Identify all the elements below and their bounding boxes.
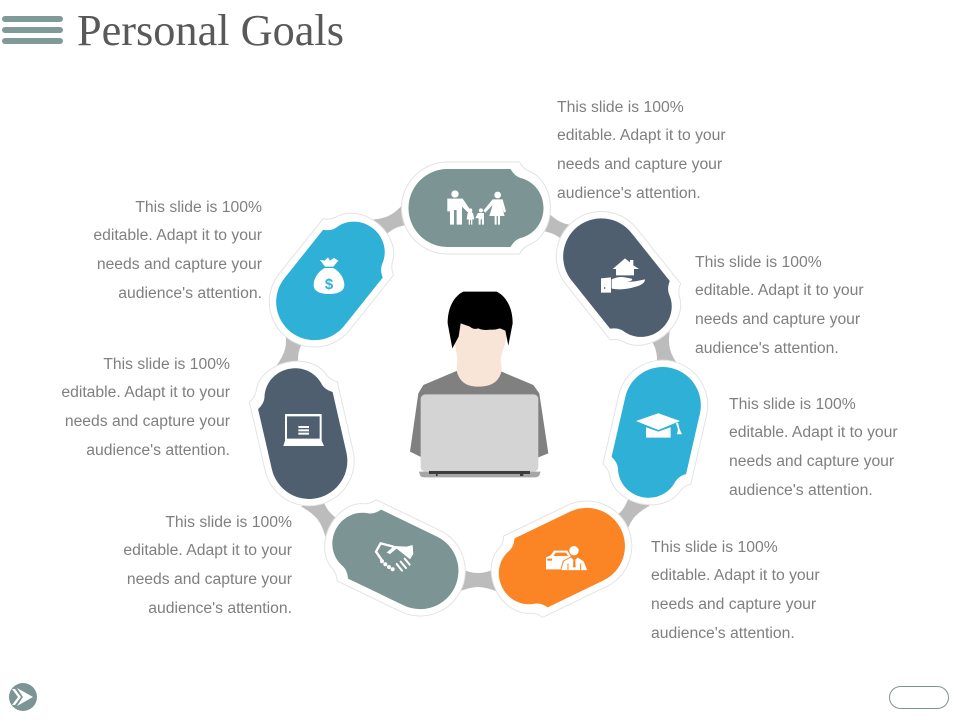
pill: car and person xyxy=(476,486,647,630)
text: family: editable. Adapt it to your xyxy=(557,127,726,144)
text: money: audience's attention. xyxy=(118,285,262,302)
icon: graduation cap xyxy=(636,413,682,438)
text: laptop xyxy=(61,356,230,459)
text: house: needs and capture your xyxy=(695,311,860,328)
text: house: This slide is 100% xyxy=(695,254,822,270)
text: money: editable. Adapt it to your xyxy=(93,227,262,244)
text: car: needs and capture your xyxy=(651,596,816,613)
pill: money xyxy=(251,195,413,365)
text: laptop: needs and capture your xyxy=(65,413,230,430)
text: handshake: audience's attention. xyxy=(148,600,292,617)
text: car xyxy=(651,538,820,642)
icon: family xyxy=(447,190,506,225)
icon: money bag xyxy=(314,257,344,294)
text: house xyxy=(695,254,864,357)
text: handshake: This slide is 100% xyxy=(165,514,292,530)
rounded button xyxy=(890,686,948,708)
text: car: editable. Adapt it to your xyxy=(651,567,820,584)
ring connectors xyxy=(276,202,679,592)
icon: car dealer xyxy=(546,546,588,571)
pill: laptop xyxy=(243,352,363,515)
icon: handshake xyxy=(376,543,413,571)
pill: family xyxy=(402,162,550,254)
text: graduation: needs and capture your xyxy=(729,453,894,470)
text: graduation: This slide is 100% xyxy=(729,396,856,412)
text: house: editable. Adapt it to your xyxy=(695,282,864,299)
text: money: needs and capture your xyxy=(97,256,262,273)
text: family: This slide is 100% xyxy=(557,98,684,116)
text: handshake xyxy=(123,514,292,617)
text: money: This slide is 100% xyxy=(135,198,262,216)
person at laptop xyxy=(410,292,548,477)
pill: house xyxy=(538,193,700,364)
pill: graduation xyxy=(596,351,717,514)
text: family: audience's attention. xyxy=(557,185,701,202)
text: family xyxy=(557,98,726,202)
next button xyxy=(9,683,37,711)
icon: laptop xyxy=(283,414,324,446)
text: graduation: audience's attention. xyxy=(729,482,873,499)
text: family: needs and capture your xyxy=(557,156,722,173)
text: car: This slide is 100% xyxy=(651,538,778,556)
pill: handshake xyxy=(310,487,480,631)
text: handshake: editable. Adapt it to your xyxy=(123,542,292,559)
text: laptop: This slide is 100% xyxy=(103,356,230,372)
icon: money bag: $ xyxy=(325,276,334,293)
text: graduation xyxy=(729,396,898,499)
text: money xyxy=(93,198,262,302)
text: graduation: editable. Adapt it to your xyxy=(729,424,898,441)
text: laptop: editable. Adapt it to your xyxy=(61,384,230,401)
icon: house in hand xyxy=(601,258,645,293)
text: laptop: audience's attention. xyxy=(86,442,230,459)
title: Personal Goals xyxy=(77,6,344,55)
text: house: audience's attention. xyxy=(695,340,839,357)
menu icon xyxy=(2,16,63,44)
text: handshake: needs and capture your xyxy=(127,571,292,588)
text: car: audience's attention. xyxy=(651,625,795,642)
